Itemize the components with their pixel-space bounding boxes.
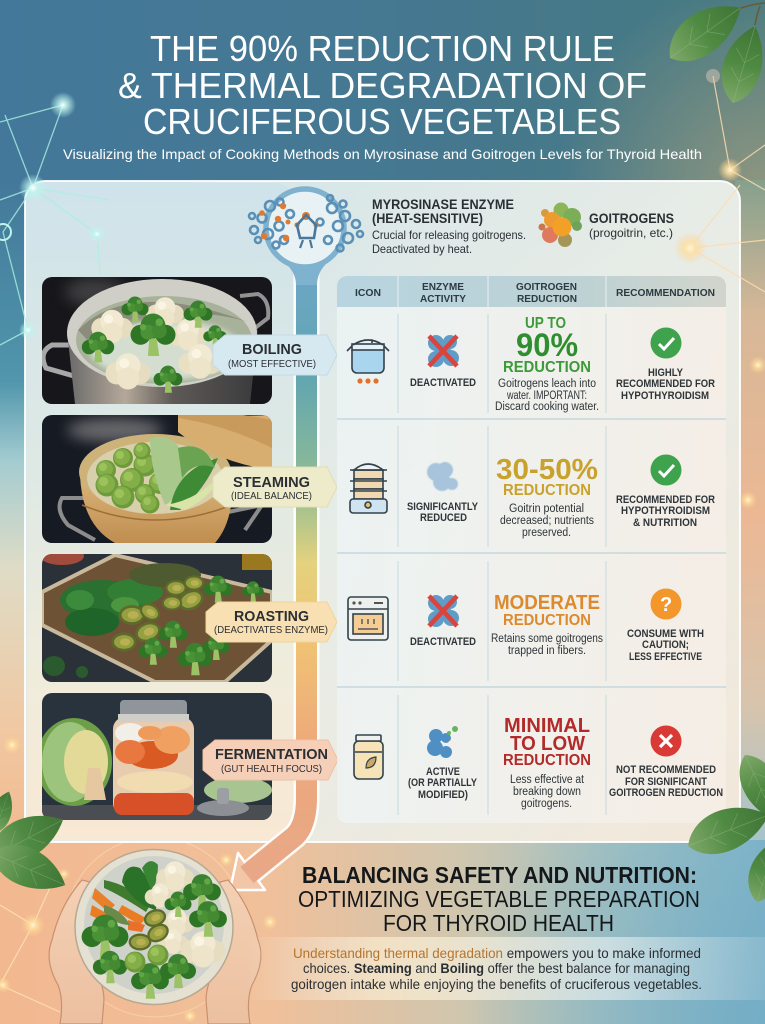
reduction: 30-50 percent: REDUCTION bbox=[503, 482, 591, 499]
text: active: (OR PARTIALLY bbox=[408, 777, 478, 789]
title: CRUCIFEROUS VEGETABLES bbox=[143, 101, 621, 142]
recommendation: roasting: LESS EFFECTIVE bbox=[629, 651, 702, 663]
reduction: up to 90 percent: REDUCTION bbox=[503, 359, 591, 376]
myrosinase text: (HEAT-SENSITIVE) bbox=[372, 210, 483, 226]
conclusion heading: OPTIMIZING VEGETABLE PREPARATION bbox=[298, 886, 700, 912]
label: roasting: (DEACTIVATES ENZYME) bbox=[214, 624, 328, 636]
leaves bottom left bbox=[0, 788, 73, 902]
conclusion body text: goitrogen intake while enjoying the benefits of cruciferous vegetables. bbox=[291, 976, 702, 992]
recommendation: steaming: HYPOTHYROIDISM bbox=[621, 505, 710, 517]
leaves right bbox=[680, 747, 765, 906]
text: deactivated boiling: DEACTIVATED bbox=[410, 377, 476, 389]
table header: ENZYME bbox=[422, 281, 464, 293]
recommendation: boiling: HYPOTHYROIDISM bbox=[621, 390, 709, 402]
conclusion body text bbox=[291, 945, 702, 992]
table header bbox=[355, 281, 715, 305]
reduction: minimal to low bbox=[503, 715, 591, 769]
label: steaming: STEAMING bbox=[233, 474, 310, 491]
conclusion heading bbox=[298, 862, 700, 936]
icon: active enzyme bbox=[427, 726, 458, 758]
note: boiling: Goitrogens leach into bbox=[498, 378, 596, 390]
photo: fermentation jar and cabbage bbox=[36, 693, 272, 820]
goitrogens text bbox=[589, 210, 674, 240]
myrosinase text: MYROSINASE ENZYME bbox=[372, 196, 514, 212]
note: fermentation: breaking down bbox=[513, 786, 581, 798]
network decoration top bbox=[0, 69, 765, 509]
text: active: MODIFIED) bbox=[418, 789, 468, 801]
conclusion band bbox=[245, 937, 765, 1000]
spoon handle arrow bbox=[230, 268, 306, 890]
goitrogens text: (progoitrin, etc.) bbox=[589, 226, 673, 240]
recommendation: roasting: ? bbox=[660, 594, 672, 616]
goitrogens text: GOITROGENS bbox=[589, 210, 674, 226]
recommendation: roasting: CAUTION; bbox=[642, 639, 689, 651]
left panel column tint bbox=[27, 183, 293, 840]
note: fermentation: goitrogens. bbox=[521, 798, 572, 810]
icon: deactivated enzyme roasting bbox=[428, 595, 459, 627]
recommendation: fermentation bbox=[609, 726, 723, 799]
table header: ICON bbox=[355, 287, 381, 299]
icon: deactivated enzyme boiling bbox=[428, 335, 459, 367]
recommendation: steaming: RECOMMENDED FOR bbox=[616, 494, 715, 506]
note: steaming: decreased; nutrients bbox=[500, 515, 594, 527]
recommendation: fermentation: NOT RECOMMENDED bbox=[616, 764, 716, 776]
conclusion heading: FOR THYROID HEALTH bbox=[383, 910, 614, 936]
conclusion body text: choices. Steaming and Boiling offer the best balance for managing bbox=[303, 960, 690, 976]
icon: boiling pot bbox=[347, 340, 389, 384]
recommendation: roasting bbox=[627, 588, 704, 663]
table header: REDUCTION bbox=[517, 293, 577, 305]
reduction: up to 90 percent bbox=[503, 315, 591, 376]
photo: roasting tray bbox=[40, 547, 272, 682]
reduction: moderate: MODERATE bbox=[494, 592, 600, 614]
label: fermentation: (GUT HEALTH FOCUS) bbox=[221, 763, 322, 775]
table header: GOITROGEN bbox=[516, 281, 577, 293]
reduction: 30-50 percent: 30-50% bbox=[496, 454, 598, 486]
reduction: up to 90 percent: 90% bbox=[516, 327, 578, 363]
text: significantly reduced: REDUCED bbox=[420, 512, 467, 524]
myrosinase text bbox=[372, 196, 526, 256]
label: roasting bbox=[206, 602, 337, 642]
label: boiling: BOILING bbox=[242, 341, 302, 358]
label: steaming bbox=[213, 467, 337, 507]
note: fermentation bbox=[510, 774, 585, 810]
label: roasting: ROASTING bbox=[234, 608, 309, 625]
label: fermentation bbox=[203, 740, 338, 780]
icon: goitrogens molecule cluster bbox=[538, 202, 582, 247]
recommendation: steaming bbox=[616, 454, 715, 529]
comparison table bbox=[337, 276, 726, 823]
text: significantly reduced: SIGNIFICANTLY bbox=[407, 501, 479, 513]
recommendation: boiling: RECOMMENDED FOR bbox=[616, 378, 715, 390]
icon: reduced enzyme cloud bbox=[427, 462, 458, 491]
icon: steamer bbox=[350, 464, 387, 513]
icon: jar bbox=[354, 735, 383, 779]
note: roasting: trapped in fibers. bbox=[508, 645, 586, 657]
note: roasting: Retains some goitrogens bbox=[491, 633, 603, 645]
note: boiling: water. IMPORTANT: bbox=[506, 390, 587, 402]
label: fermentation: FERMENTATION bbox=[215, 746, 328, 763]
reduction: up to 90 percent: UP TO bbox=[525, 315, 566, 332]
myrosinase text: Crucial for releasing goitrogens. bbox=[372, 228, 526, 242]
text: active bbox=[408, 766, 478, 801]
table header: RECOMMENDATION bbox=[616, 287, 715, 299]
icon: oven bbox=[348, 597, 388, 640]
table header: ACTIVITY bbox=[420, 293, 466, 305]
reduction: minimal to low: REDUCTION bbox=[503, 752, 591, 769]
left hand bbox=[49, 880, 104, 1024]
title: THE 90% REDUCTION RULE bbox=[150, 28, 615, 69]
recommendation: roasting: CONSUME WITH bbox=[627, 628, 704, 640]
plate rim bbox=[75, 850, 233, 1004]
recommendation: boiling bbox=[616, 328, 715, 402]
main panel bbox=[25, 181, 740, 842]
plate of vegetables held by hands bbox=[49, 850, 261, 1024]
conclusion heading: BALANCING SAFETY AND NUTRITION: bbox=[302, 862, 697, 888]
conclusion body text: Understanding thermal degradation empowers you to make informed bbox=[293, 945, 701, 961]
photo: boiling pot with broccoli and cauliflower bbox=[42, 277, 272, 404]
reduction: moderate bbox=[494, 592, 600, 629]
subtitle: Visualizing the Impact of Cooking Methods on Myrosinase and Goitrogen Levels for Thyroid Health bbox=[63, 146, 702, 162]
photo: steaming bamboo basket bbox=[42, 412, 272, 543]
recommendation: fermentation: GOITROGEN REDUCTION bbox=[609, 787, 723, 799]
label: steaming: (IDEAL BALANCE) bbox=[231, 490, 312, 502]
note: boiling bbox=[495, 378, 599, 413]
reduction: minimal to low: MINIMAL bbox=[504, 715, 590, 737]
right hand bbox=[206, 880, 261, 1024]
note: steaming: preserved. bbox=[522, 527, 571, 539]
title bbox=[118, 28, 647, 142]
reduction: moderate: REDUCTION bbox=[503, 612, 591, 629]
vegetables bbox=[82, 861, 227, 999]
note: steaming: Goitrin potential bbox=[509, 503, 584, 515]
text: deactivated roasting: DEACTIVATED bbox=[410, 636, 476, 648]
note: steaming bbox=[500, 503, 594, 539]
text: significantly reduced bbox=[407, 501, 479, 524]
title: & THERMAL DEGRADATION OF bbox=[118, 65, 647, 106]
reduction: 30-50 percent bbox=[496, 454, 598, 499]
note: roasting bbox=[491, 633, 603, 657]
reduction: minimal to low: TO LOW bbox=[510, 733, 585, 755]
leaves top right bbox=[657, 0, 765, 108]
myrosinase text: Deactivated by heat. bbox=[372, 242, 472, 256]
label: boiling: (MOST EFFECTIVE) bbox=[228, 358, 316, 370]
recommendation: boiling: HIGHLY bbox=[648, 367, 684, 379]
recommendation: steaming: & NUTRITION bbox=[633, 517, 697, 529]
text: active: ACTIVE bbox=[426, 766, 460, 778]
spoon bowl with myrosinase molecule bbox=[249, 189, 363, 285]
plate well bbox=[84, 856, 224, 994]
label: boiling bbox=[213, 335, 337, 375]
note: fermentation: Less effective at bbox=[510, 774, 585, 786]
bottom network decoration bbox=[0, 736, 278, 1023]
recommendation: fermentation: FOR SIGNIFICANT bbox=[625, 776, 707, 788]
note: boiling: Discard cooking water. bbox=[495, 401, 599, 413]
